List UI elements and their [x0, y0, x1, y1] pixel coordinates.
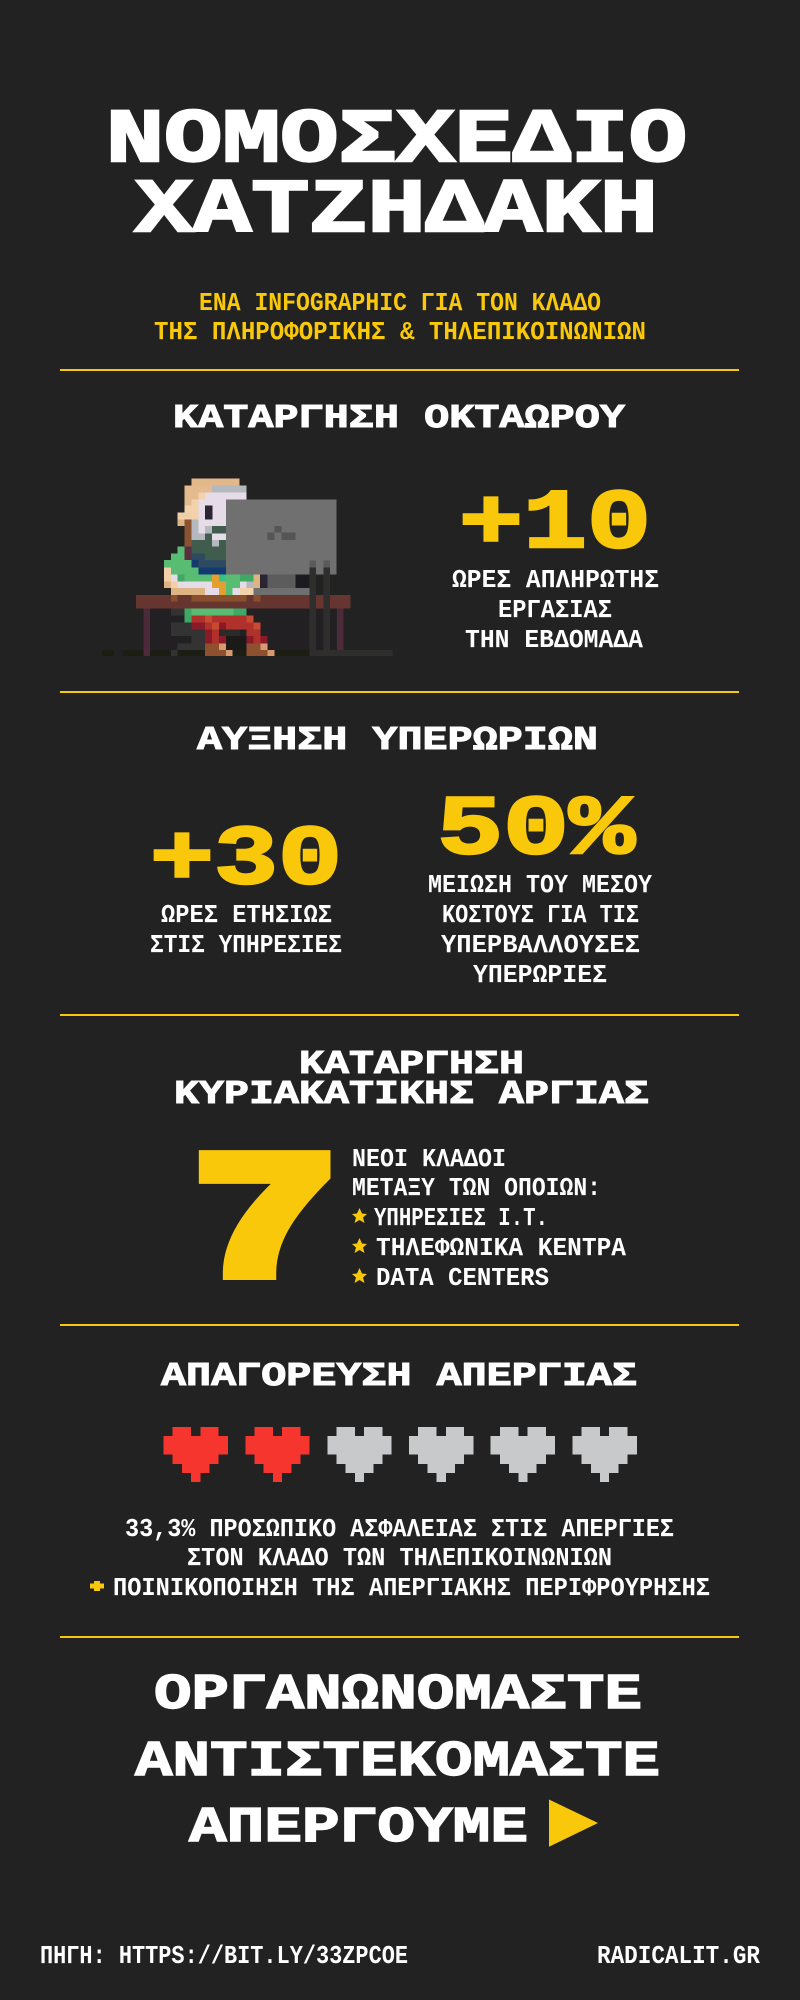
text: strike restrictions: 33,3% ΠΡΟΣΩΠΙΚΟ ΑΣΦΑΛΕΙΑΣ ΣΤΙΣ ΑΠΕΡΓΙΕΣ: [125, 1514, 674, 1544]
icons: six pixel hearts: [164, 1427, 637, 1482]
call to action: [135, 1667, 660, 1857]
heading: αύξηση υπερωριών: ΑΥΞΗΣΗ ΥΠΕΡΩΡΙΩΝ: [197, 722, 598, 759]
text: unpaid hours per week: ΤΗΝ ΕΒΔΟΜΑΔΑ: [465, 625, 643, 655]
text: yearly hours in services: [150, 900, 342, 960]
subtitle: ΤΗΣ ΠΛΗΡΟΦΟΡΙΚΗΣ & ΤΗΛΕΠΙΚΟΙΝΩΝΙΩΝ: [154, 317, 646, 347]
heading: κατάργηση κυριακάτικης αργίας: [174, 1046, 649, 1113]
text: overtime cost reduction: ΜΕΙΩΣΗ ΤΟΥ ΜΕΣΟΥ: [428, 870, 652, 900]
title: ΧΑΤΖΗΔΑΚΗ: [135, 168, 658, 254]
text: overtime cost reduction: ΥΠΕΡΩΡΙΕΣ: [473, 960, 607, 990]
call to action: ΑΠΕΡΓΟΥΜΕ: [189, 1800, 528, 1857]
heading: απαγόρευση απεργίας: ΑΠΑΓΟΡΕΥΣΗ ΑΠΕΡΓΙΑΣ: [161, 1358, 637, 1395]
icon: star: [352, 1208, 367, 1223]
text: overtime cost reduction: ΚΟΣΤΟΥΣ ΓΙΑ ΤΙΣ: [442, 900, 639, 930]
stat: +10 hours: +10: [459, 478, 651, 573]
heading: κατάργηση οκταώρου: ΚΑΤΑΡΓΗΣΗ ΟΚΤΑΩΡΟΥ: [173, 400, 625, 437]
list: new sectors: ΤΗΛΕΦΩΝΙΚΑ ΚΕΝΤΡΑ: [376, 1233, 626, 1263]
list: new sectors: DATA CENTERS: [376, 1263, 549, 1293]
list: new sectors: [352, 1144, 626, 1293]
subtitle: ΕΝΑ INFOGRAPHIC ΓΙΑ ΤΟΝ ΚΛΑΔΟ: [199, 288, 601, 318]
heading: κατάργηση κυριακάτικης αργίας: ΚΥΡΙΑΚΑΤΙΚΗΣ ΑΡΓΙΑΣ: [174, 1076, 649, 1113]
text: overtime cost reduction: [428, 870, 652, 990]
text: yearly hours in services: ΩΡΕΣ ΕΤΗΣΙΩΣ: [161, 900, 332, 930]
illustration: pixel worker at a computer: [102, 478, 393, 656]
icon: star: [352, 1268, 367, 1283]
stat: 7: 7: [193, 1126, 337, 1326]
call to action: ΑΝΤΙΣΤΕΚΟΜΑΣΤΕ: [135, 1734, 660, 1791]
text: strike restrictions: ΠΟΙΝΙΚΟΠΟΙΗΣΗ ΤΗΣ ΑΠΕΡΓΙΑΚΗΣ ΠΕΡΙΦΡΟΥΡΗΣΗΣ: [113, 1573, 710, 1603]
stat: 50%: 50%: [437, 784, 636, 879]
source: ΠΗΓΗ: HTTPS://BIT.LY/33ZPCOE: [40, 1941, 408, 1971]
text: overtime cost reduction: ΥΠΕΡΒΑΛΛΟΥΣΕΣ: [441, 930, 640, 960]
subtitle: [154, 288, 646, 347]
list: new sectors: ΝΕΟΙ ΚΛΑΔΟΙ: [352, 1144, 506, 1174]
call to action: ΟΡΓΑΝΩΝΟΜΑΣΤΕ: [154, 1667, 642, 1724]
text: unpaid hours per week: ΩΡΕΣ ΑΠΛΗΡΩΤΗΣ: [452, 565, 659, 595]
text: strike restrictions: [90, 1514, 710, 1603]
list: new sectors: ΥΠΗΡΕΣΙΕΣ Ι.Τ.: [374, 1203, 548, 1233]
text: unpaid hours per week: ΕΡΓΑΣΙΑΣ: [498, 595, 612, 625]
list: new sectors: ΜΕΤΑΞΥ ΤΩΝ ΟΠΟΙΩΝ:: [352, 1173, 601, 1203]
title: [106, 98, 687, 254]
text: yearly hours in services: ΣΤΙΣ ΥΠΗΡΕΣΙΕΣ: [150, 930, 342, 960]
website: RADICALIT.GR: [597, 1941, 760, 1971]
text: unpaid hours per week: [452, 565, 659, 655]
icon: star: [352, 1238, 367, 1253]
title: ΝΟΜΟΣΧΕΔΙΟ: [106, 98, 687, 184]
icon: arrow: [549, 1800, 598, 1847]
heading: κατάργηση κυριακάτικης αργίας: ΚΑΤΑΡΓΗΣΗ: [299, 1046, 524, 1083]
icon: plus: [90, 1581, 104, 1591]
text: strike restrictions: ΣΤΟΝ ΚΛΑΔΟ ΤΩΝ ΤΗΛΕΠΙΚΟΙΝΩΝΙΩΝ: [187, 1543, 612, 1573]
stat: +30 hours: +30: [150, 814, 342, 909]
